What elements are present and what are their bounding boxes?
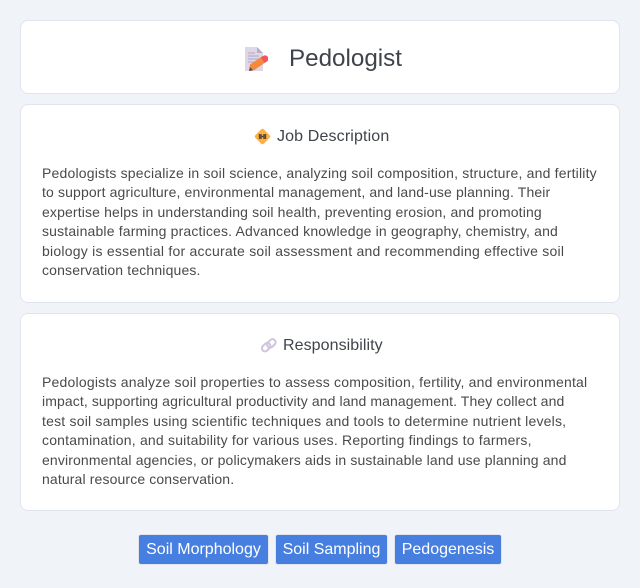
text block: job description: Pedologists specialize in soil science, analyzing soil composition, structure, and fertility (42, 165, 597, 181)
text block: responsibility: impact, supporting agricultural productivity and land management. They collect and (42, 393, 564, 409)
title: Pedologist (289, 45, 402, 72)
text block: responsibility (42, 374, 587, 487)
icon: diamond sign (254, 128, 270, 144)
text block: job description: to support agriculture, environmental management, and land-use planning. Their (42, 184, 550, 200)
text block: job description: conservation techniques. (42, 262, 201, 278)
text block: responsibility: contamination, and suitability for various uses. Reporting findings to farmers, (42, 432, 532, 448)
tag: Pedogenesis: Pedogenesis (402, 541, 494, 558)
text block: responsibility: natural resource conservation. (42, 471, 234, 487)
tag: Soil Morphology (138, 534, 269, 565)
text block: responsibility: test soil samples using scientific techniques and tools to determine nutrient levels, (42, 413, 566, 429)
text block: job description: biology is essential for accurate soil assessment and recommending effective soil (42, 243, 564, 259)
panel: responsibility (20, 313, 620, 511)
text block: job description: expertise helps in understanding soil health, preventing erosion, and promoting (42, 204, 542, 220)
icon: document with pencil (245, 47, 268, 71)
text block: job description (42, 165, 597, 278)
tag: Soil Sampling: Soil Sampling (283, 541, 380, 558)
text block: job description: sustainable farming practices. Advanced knowledge in geography, chemistry, and (42, 223, 558, 239)
icon: chain link (261, 338, 277, 352)
heading: responsibility: Responsibility (283, 337, 383, 354)
panel: job description (20, 104, 620, 303)
text block: responsibility: Pedologists analyze soil properties to assess composition, fertility, and environmental (42, 374, 587, 390)
tag: Soil Morphology: Soil Morphology (146, 541, 261, 558)
text block: responsibility: environmental agencies, or policymakers aids in sustainable land use planning and (42, 452, 566, 468)
heading: job description: Job Description (277, 128, 389, 145)
tag: Pedogenesis (394, 534, 502, 565)
tag: Soil Sampling (275, 534, 388, 565)
panel: title card (20, 20, 620, 94)
